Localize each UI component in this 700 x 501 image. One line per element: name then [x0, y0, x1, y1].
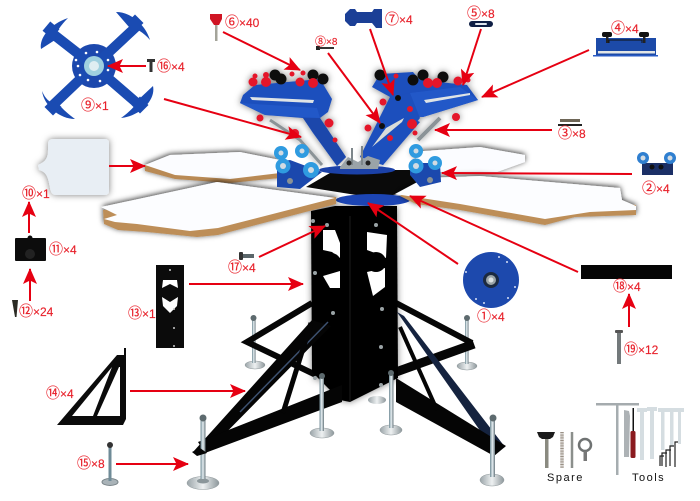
platen: front right	[395, 176, 636, 225]
icon: part 19 bolt	[615, 330, 623, 364]
label: 18 x4: ⑱×4	[613, 278, 641, 294]
label: 2 x4: ②×4	[642, 180, 670, 196]
hub plate and centre mechanism	[319, 146, 395, 174]
arrow: part 14 to leg	[130, 390, 245, 392]
arrow: part 7 to arm bracket	[370, 29, 393, 95]
arrow: part 18 to base	[410, 196, 578, 272]
icon: part 5 link plate	[469, 21, 493, 27]
label: 16 x4: ⑯×4	[157, 58, 185, 74]
red knobs	[248, 70, 338, 142]
stand: back legs	[247, 303, 474, 375]
heading: Spare: Spare	[547, 472, 584, 484]
arrow: part 17 to column bolt	[259, 226, 325, 257]
icon: part 11 bearing block	[15, 236, 46, 261]
label: 15 x8: ⑮×8	[77, 455, 105, 471]
roller assembly: left	[274, 144, 322, 189]
platen: back right	[410, 147, 525, 172]
press hub base	[306, 170, 440, 206]
arrow: part 10 to platen	[109, 165, 145, 167]
label: 7 x4: ⑦×4	[385, 11, 413, 27]
black knobs	[374, 70, 448, 86]
arrow: part 15 to foot	[116, 463, 188, 465]
label: 13 x1: ⑬×1	[128, 305, 156, 321]
arrow: part 8 to bolt	[328, 53, 380, 123]
icon: part 2 roller bracket	[637, 152, 676, 175]
icon: part 1 disc	[463, 252, 519, 308]
icon: part 12 wood screw	[12, 300, 18, 317]
arrow: part 2 to rollers	[442, 173, 632, 174]
arrow: part 16 to hub	[108, 65, 146, 67]
icon: part 10 platen	[38, 139, 109, 195]
label: 8 x8: ⑧×8	[315, 35, 338, 48]
icon: part 17 bolt	[239, 252, 254, 260]
column windows	[323, 230, 387, 296]
stand: central column	[311, 206, 398, 402]
label: 12 x24: ⑫×24	[19, 303, 54, 319]
arrow: part 6 to knobs	[223, 32, 300, 70]
label: 10 x1: ⑩×1	[22, 185, 50, 201]
icon group: tools	[596, 403, 684, 475]
icon: part 4 screen clamp	[593, 32, 658, 56]
label: 19 x12: ⑲×12	[624, 341, 659, 357]
stand: front legs	[193, 312, 506, 456]
roller assembly: right	[408, 144, 442, 187]
stand: front feet	[187, 370, 504, 490]
icon: part 16 screw	[147, 59, 155, 72]
label: 1 x4: ①×4	[477, 308, 505, 324]
platen: front left	[101, 182, 336, 237]
heading: Tools: Tools	[632, 472, 665, 484]
black knobs	[270, 70, 328, 84]
label: 4 x4: ④×4	[611, 20, 639, 36]
label: 5 x8: ⑤×8	[467, 5, 495, 21]
arrow: part 5 to head	[463, 29, 481, 85]
arrow: part 12 to part 11	[29, 269, 31, 301]
label: 6 x40: ⑥×40	[225, 14, 260, 30]
label: 3 x8: ③×8	[558, 125, 586, 141]
icon group: spare parts	[537, 432, 591, 468]
icon: part 7 bracket	[345, 9, 382, 28]
icon: part 18 bar	[581, 265, 672, 279]
arrow: part 3 to spring	[435, 129, 552, 131]
icon: part 14 triangle bracket	[57, 348, 126, 425]
icon: part 13 column panel	[156, 265, 184, 348]
left print head	[240, 70, 346, 166]
icon: part 9 rotary arm cross	[41, 12, 153, 119]
arrow: part 13 to column	[189, 283, 303, 285]
label: 11 x4: ⑪×4	[49, 241, 77, 257]
label: 17 x4: ⑰×4	[228, 259, 256, 275]
label: 14 x4: ⑭×4	[46, 385, 74, 401]
icon: part 8 bolt	[316, 46, 334, 50]
arrow: part 4 to clamp	[482, 50, 589, 97]
arrow: part 1 to disc	[368, 203, 458, 264]
label: 9 x1: ⑨×1	[81, 97, 109, 113]
arrow: part 9 to arm	[164, 99, 301, 137]
arrow: part 11 to part 10	[28, 202, 30, 233]
stand: back feet	[245, 315, 477, 406]
right print head	[360, 70, 478, 165]
icon: part 15 foot	[102, 442, 118, 486]
icon: part 6 knob	[210, 14, 222, 41]
red knobs	[364, 74, 470, 141]
arrow: part 19 to part 18	[628, 294, 630, 327]
platen: back left	[145, 152, 280, 183]
icon: part 3 spring turnbuckle	[558, 119, 582, 126]
